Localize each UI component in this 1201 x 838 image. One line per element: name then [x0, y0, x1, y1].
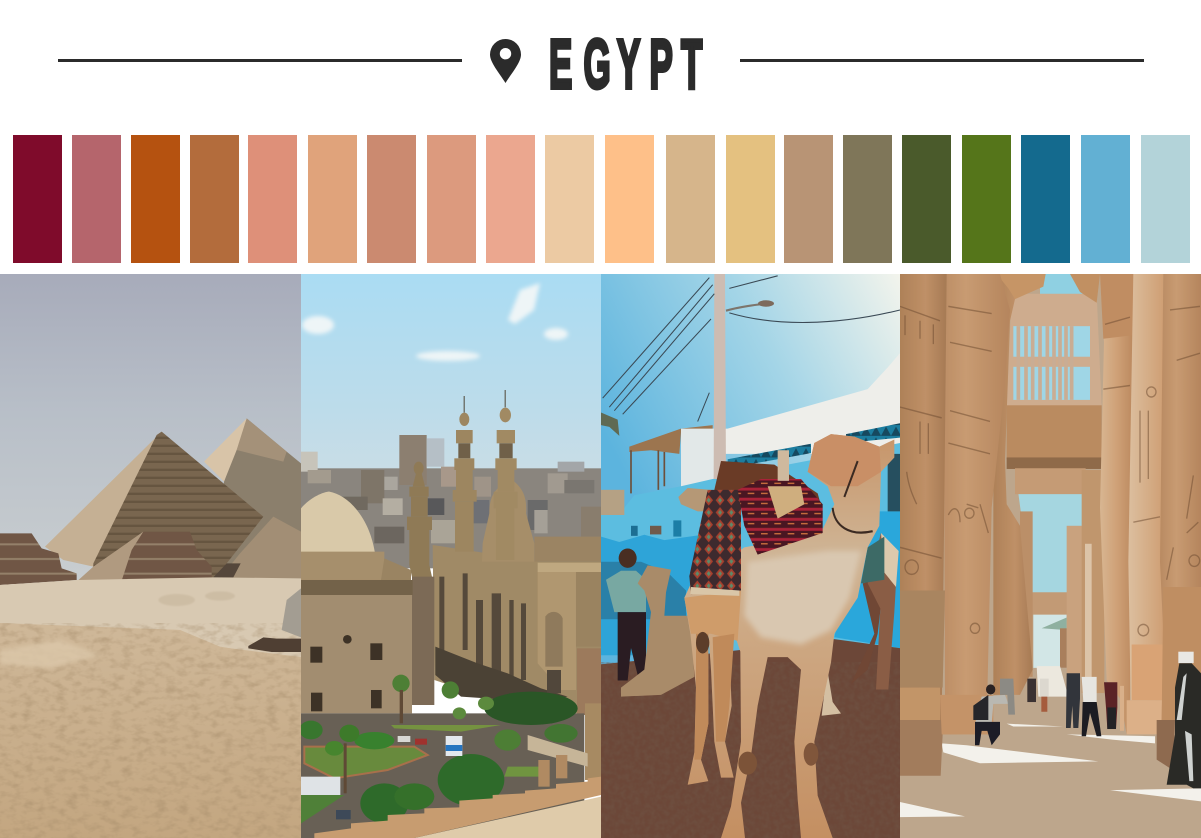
- back pyramid: [204, 418, 301, 580]
- upper window grille: [1007, 294, 1102, 407]
- right columns: [1070, 274, 1201, 770]
- left columns: [900, 274, 1046, 776]
- man in robe at right edge: [1167, 652, 1201, 788]
- blue house: [601, 429, 900, 655]
- person: [606, 548, 646, 680]
- shadow at right pyramid foot: [213, 563, 241, 577]
- minaret left of pair: [453, 396, 477, 552]
- minaret right of pair with dome: [482, 390, 534, 562]
- photo panel: camel in front of blue house: [601, 274, 900, 838]
- lintels: [1007, 405, 1102, 615]
- vehicles: [301, 736, 462, 819]
- far side foreleg: [822, 675, 841, 716]
- crouching photographer: [973, 684, 1008, 745]
- white upper building: [681, 353, 900, 454]
- mid sand with dunes: [0, 577, 301, 660]
- far columns: [1020, 470, 1104, 693]
- colour palette swatches: [13, 135, 1190, 263]
- couple walking: [1000, 673, 1117, 736]
- sand foreground texture: [0, 623, 301, 838]
- blue roof frieze: [728, 423, 900, 464]
- camel saddle blanket: [689, 450, 823, 596]
- title: Egypt with location pin and rules: [58, 25, 1144, 103]
- temple floor: [900, 666, 1201, 838]
- lawns and curbs: [301, 725, 588, 823]
- clouds: [302, 283, 568, 361]
- main pyramid: [45, 432, 263, 582]
- rock and objects at right: [248, 588, 301, 652]
- heading: EGYPT: [549, 25, 703, 103]
- trees: [299, 675, 578, 823]
- front minaret: [407, 462, 433, 580]
- camel halter: [833, 461, 873, 533]
- distant visitors: [1027, 679, 1124, 731]
- ground texture: [601, 662, 884, 798]
- mosque main building: [433, 537, 601, 713]
- utility pole and wires: [603, 274, 900, 479]
- dome and front hall: [301, 492, 413, 713]
- photo panel: pyramids of Giza: [0, 274, 301, 838]
- head of camel behind saddle: [678, 488, 711, 512]
- plaza road: [301, 713, 584, 838]
- ground: [601, 639, 900, 838]
- brick building right: [577, 648, 601, 780]
- photo panel: Cairo mosque skyline: [299, 274, 601, 838]
- foreground terrace wall: [314, 755, 601, 838]
- palm leaves: [601, 412, 619, 436]
- tourists: [973, 673, 1124, 745]
- sky openings: [1018, 274, 1083, 668]
- standing camel: [684, 434, 894, 838]
- icon: location pin: [490, 39, 521, 83]
- background camel at right: [851, 533, 899, 689]
- hieroglyph carvings: [900, 306, 1200, 636]
- stepped pyramid left: [0, 533, 77, 585]
- photo panel: Karnak temple columns: [900, 274, 1201, 838]
- resting camel: [621, 565, 694, 697]
- distant city skyline: [301, 435, 601, 568]
- canopy: [629, 425, 713, 493]
- shadowed tower: [412, 577, 434, 705]
- small pyramid right: [232, 516, 301, 578]
